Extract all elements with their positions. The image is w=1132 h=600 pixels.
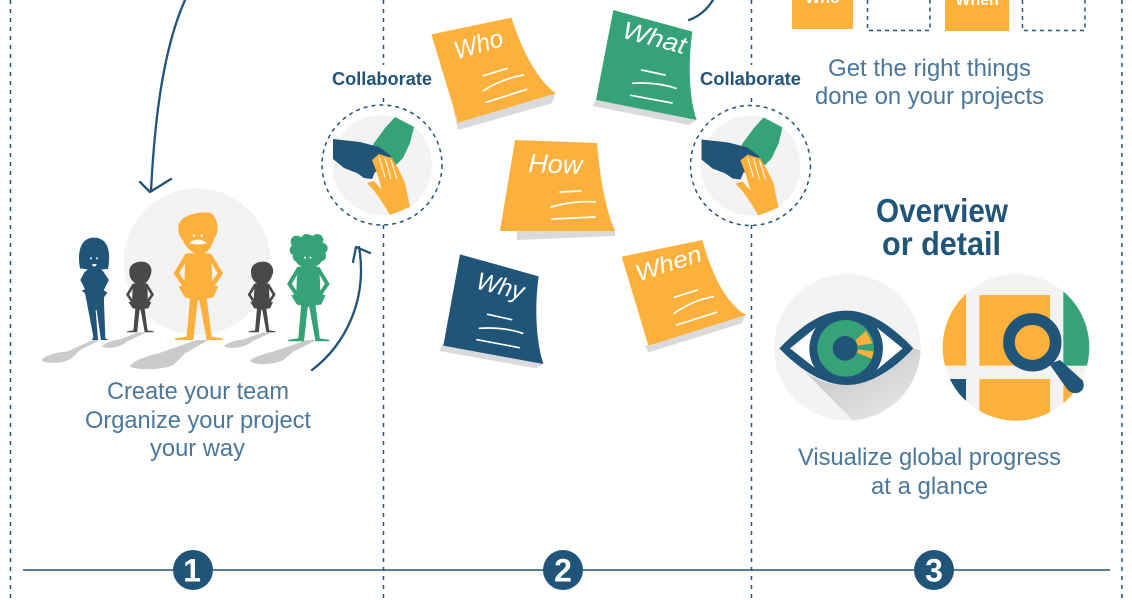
sticky note: when: When [632, 241, 705, 286]
illustration: team of five people [42, 188, 329, 369]
step badge 1 [173, 550, 213, 590]
sticky note: what [592, 10, 697, 125]
heading: overview or detail [876, 192, 1008, 262]
sticky note: when [622, 240, 746, 352]
person: small grey left [127, 262, 154, 332]
text: create your team: Create your team [107, 378, 289, 405]
text: visualize global progress: at a glance [871, 473, 988, 500]
text: create your team [85, 378, 311, 462]
label: collaborate right: Collaborate [700, 69, 801, 89]
icon: map with magnifier [940, 274, 1093, 422]
text: visualize global progress [798, 444, 1061, 500]
sticky note: what: What [619, 17, 690, 60]
text: get the right things: done on your projects [815, 83, 1044, 110]
sticky note: who [431, 18, 556, 130]
text: create your team: Organize your project [85, 407, 311, 434]
step badge 1: 1 [183, 552, 201, 588]
card: who [792, 0, 853, 29]
person: navy woman [79, 238, 109, 340]
sticky note: why [439, 254, 543, 368]
icon: collaborating hands left [322, 105, 442, 225]
sticky note: how: How [528, 148, 585, 180]
sticky note: why: Why [474, 268, 529, 306]
arrow: down to team [140, 0, 185, 192]
person: orange man with moustache [175, 212, 223, 340]
text: create your team: your way [150, 435, 245, 462]
step badge 2 [543, 550, 583, 590]
sticky note: who: Who [451, 24, 506, 65]
heading: overview or detail: Overview [876, 192, 1008, 229]
people shadows [42, 332, 317, 369]
step badge 3 [914, 550, 954, 590]
icon: eye [774, 274, 933, 421]
arrow: into what note [689, 0, 713, 20]
text: visualize global progress: Visualize global progress [798, 444, 1061, 471]
sticky note: how [500, 140, 615, 240]
icon: collaborating hands right [690, 106, 810, 226]
team background circle [124, 188, 270, 335]
person: green curly-haired [288, 234, 329, 341]
step badge 2: 2 [554, 552, 572, 588]
text: get the right things [815, 55, 1044, 110]
label: collaborate left: Collaborate [332, 69, 432, 89]
person: small grey right [248, 262, 275, 332]
text: get the right things: Get the right things [828, 55, 1031, 82]
step badge 3: 3 [925, 552, 943, 588]
card: when [945, 0, 1009, 31]
heading: overview or detail: or detail [882, 225, 1001, 262]
arrow: up to collaborate [312, 247, 370, 370]
kanban columns cropped at top [792, 0, 1085, 31]
